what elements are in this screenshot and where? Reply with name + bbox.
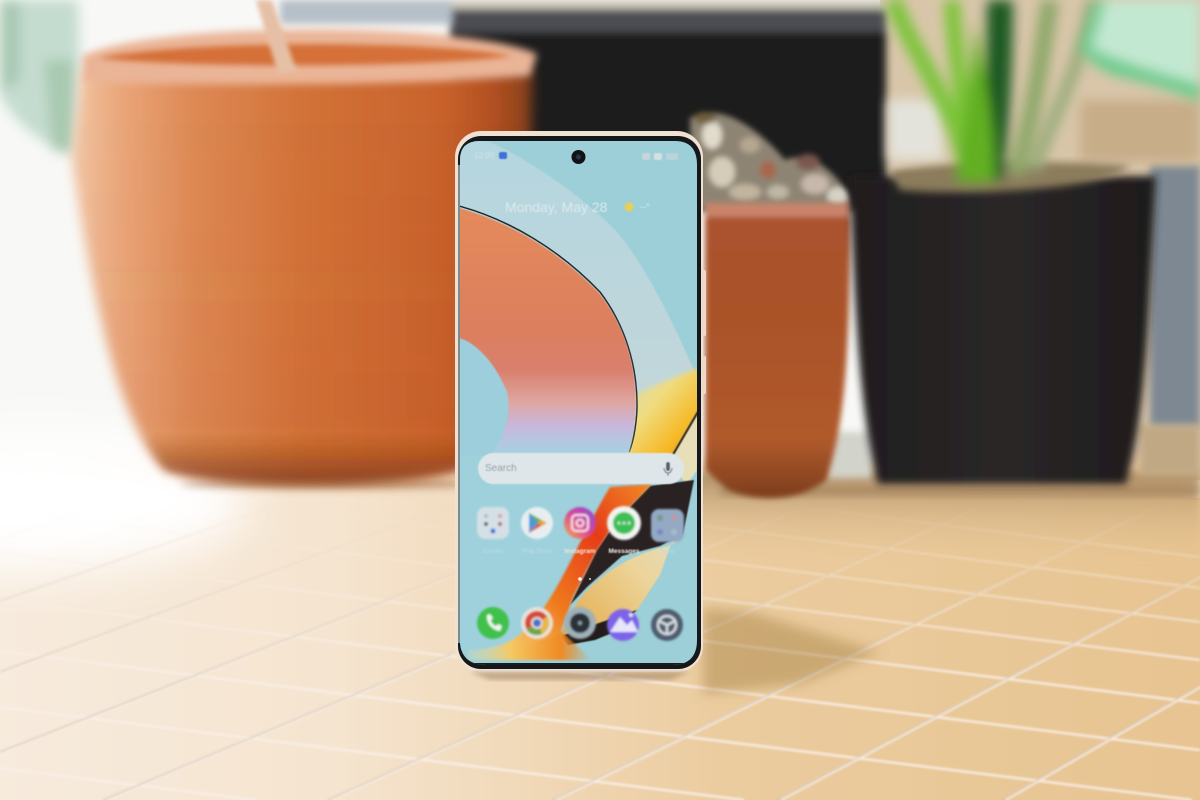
- app labels: Play Store: [522, 548, 552, 555]
- succulent plant: [690, 112, 852, 210]
- wallpaper gold curve: [628, 366, 697, 454]
- green variegated leaf: [1080, 0, 1200, 102]
- tan wall patch: [1080, 100, 1200, 162]
- app labels: Tools: [659, 548, 675, 555]
- app labels: Instagram: [564, 548, 596, 555]
- dark planter behind: [280, 0, 886, 210]
- search bar: [478, 453, 684, 484]
- page dots: [578, 577, 591, 581]
- wallpaper lower black sliver: [561, 610, 637, 645]
- status bar: [474, 151, 678, 160]
- phone frame: [455, 131, 703, 672]
- wallpaper black shape: [570, 480, 694, 605]
- black plant pot: [850, 176, 1156, 484]
- wallpaper dark edge: [672, 410, 697, 455]
- status bar: 12:00: [474, 151, 495, 160]
- icon: settings wheel: [651, 609, 683, 641]
- pale wall behind plant: [888, 100, 943, 160]
- wooden stick: [256, 0, 297, 74]
- app labels: Games: [483, 548, 504, 555]
- icon: app folder: [477, 507, 509, 539]
- weather: --°: [640, 202, 650, 212]
- icon: phone: [477, 607, 509, 639]
- bezel: [458, 136, 701, 669]
- app labels: Messages: [608, 548, 640, 555]
- pot body: [72, 70, 532, 484]
- smartphone: [455, 131, 706, 672]
- icon: chrome: [521, 607, 553, 639]
- date text: Monday, May 28: [505, 199, 608, 215]
- icon: photos: [607, 609, 639, 641]
- wallpaper dark arc outline: [459, 206, 637, 452]
- wallpaper coral disc: [459, 208, 636, 470]
- left bezel sheen: [458, 165, 461, 643]
- tiled table surface: [0, 462, 1200, 800]
- icon: instagram: [564, 507, 596, 539]
- pale leaf upper left: [0, 0, 79, 154]
- shadow of phone on the table: [703, 608, 880, 694]
- app icon row: [477, 506, 684, 542]
- wallpaper lower teal: [460, 640, 462, 650]
- wallpaper orange-red swoosh: [510, 484, 652, 648]
- wallpaper light band: [460, 141, 694, 396]
- large terracotta pot: [72, 0, 537, 484]
- wallpaper teal cutout: [460, 338, 509, 456]
- icon: messages: [607, 506, 641, 540]
- search bar: Search: [485, 463, 517, 474]
- white glow over left of table: [0, 430, 250, 570]
- dock icons: [477, 607, 683, 641]
- wallpaper gold bottom arc: [468, 630, 590, 662]
- green plant: [893, 0, 1092, 182]
- wallpaper cream shape: [562, 540, 680, 634]
- small terracotta pot: [705, 203, 851, 498]
- icon: play store: [521, 507, 553, 539]
- weather: [624, 202, 650, 212]
- icon: second folder: [651, 509, 684, 542]
- floor shadow under pots: [180, 479, 1200, 496]
- pot rim: [82, 29, 537, 84]
- side buttons: [702, 270, 706, 394]
- grey gap patch between pots: [826, 432, 872, 478]
- icon: camera: [564, 607, 596, 639]
- soil in black pot: [890, 162, 1130, 192]
- tile grout lines: [0, 523, 1200, 800]
- beige lower wall: [1140, 425, 1200, 475]
- base contact shadow: [470, 672, 690, 680]
- bottom screen edge: [474, 663, 684, 665]
- screen: [459, 139, 699, 669]
- wallpaper right edge cream: [674, 416, 697, 482]
- grey pot at far right: [1150, 165, 1200, 427]
- app labels: [483, 548, 675, 555]
- front camera: [572, 150, 586, 164]
